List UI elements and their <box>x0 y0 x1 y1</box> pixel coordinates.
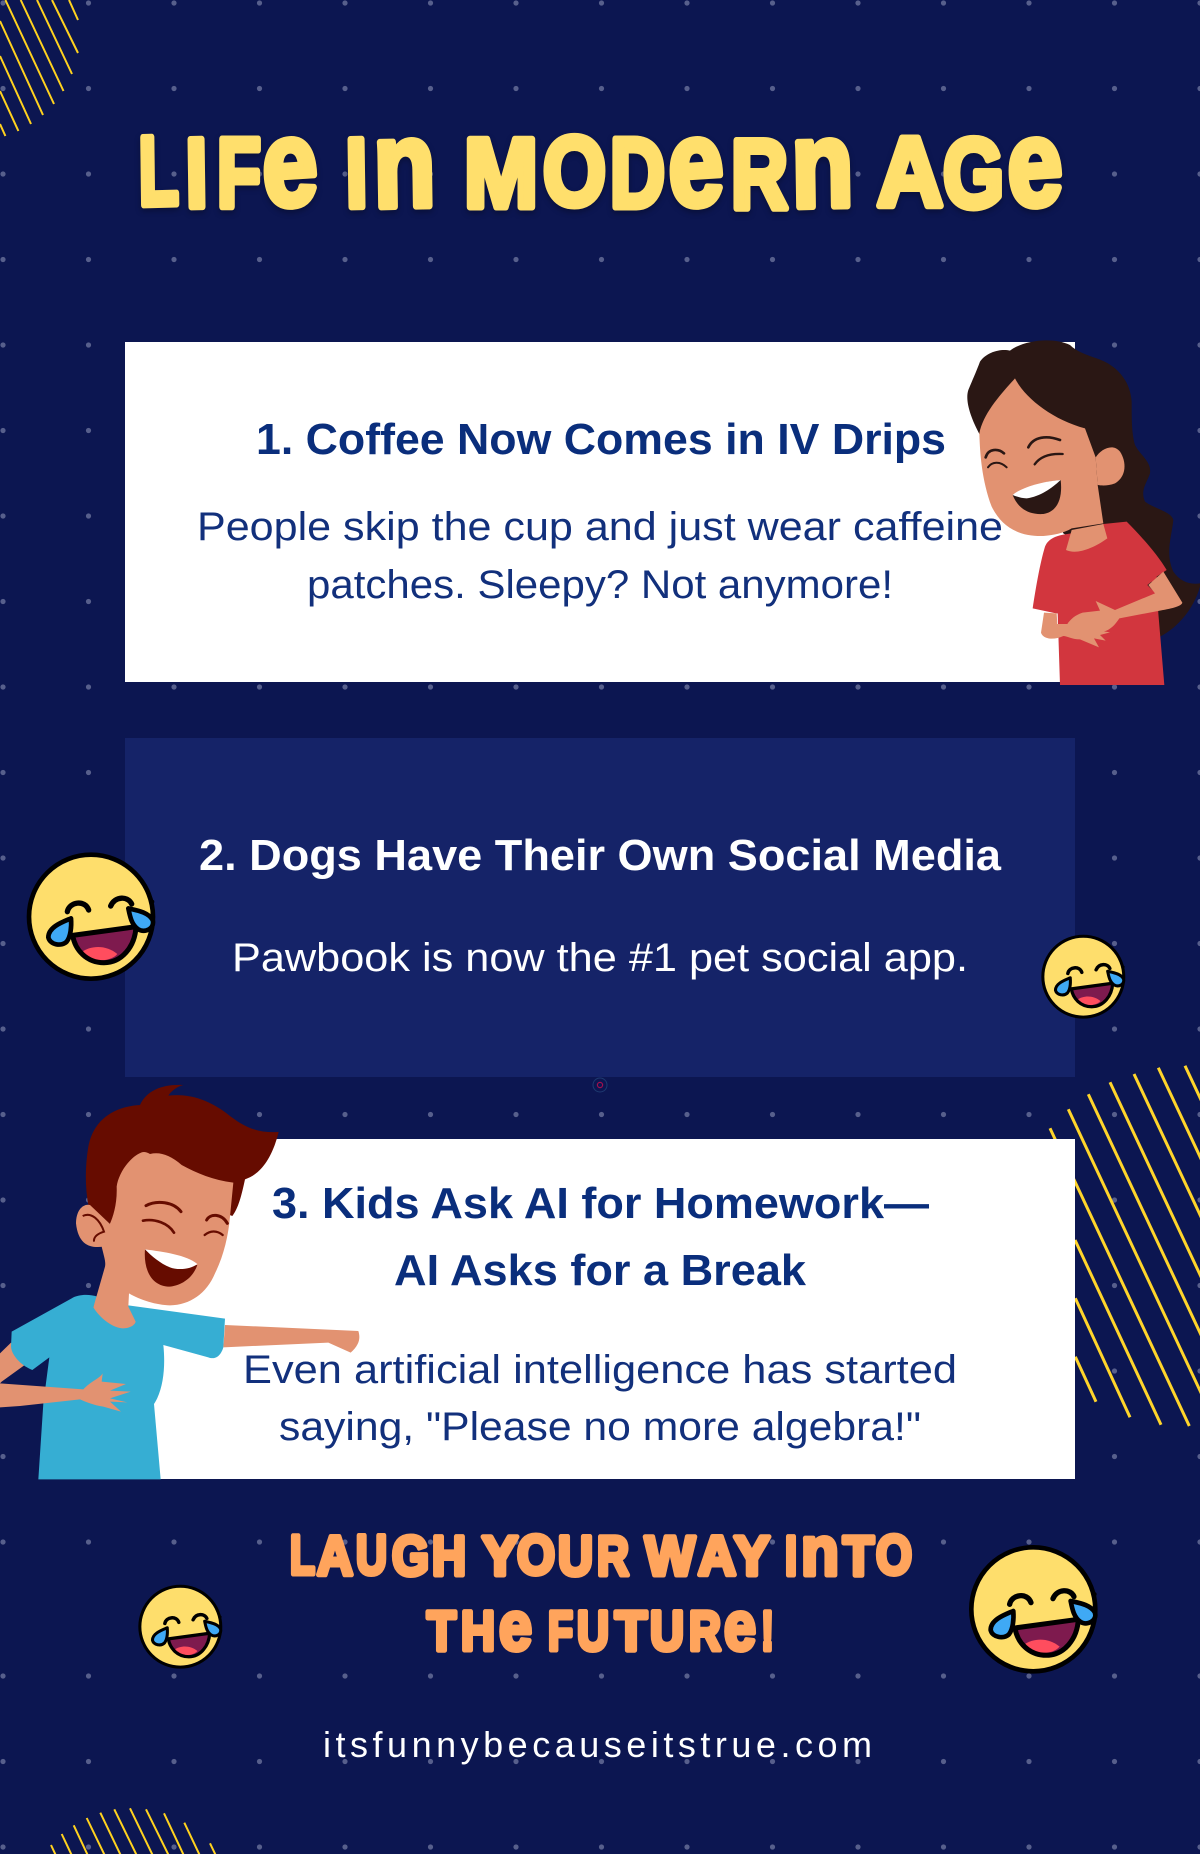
website url: itsfunnybecauseitstrue.com <box>323 1724 872 1765</box>
heading 3: AI Asks for a Break <box>394 1246 807 1295</box>
title: e <box>258 94 320 233</box>
title: e <box>1003 94 1065 233</box>
character: laughing boy <box>0 1085 359 1479</box>
emoji: small right of panel 2 <box>1043 936 1125 1017</box>
closing slogan: e <box>499 1587 532 1665</box>
decoration: yellow stripes right <box>1050 1066 1200 1426</box>
small ring mark <box>593 1078 607 1092</box>
title: A <box>877 117 943 227</box>
panel 3: kids <box>125 1139 1075 1479</box>
closing slogan: T <box>427 1599 456 1662</box>
title: D <box>610 118 665 228</box>
title: G <box>943 118 1004 228</box>
closing slogan: U <box>650 1599 684 1662</box>
title: n <box>790 96 854 233</box>
closing slogan: U <box>558 1524 593 1587</box>
closing slogan: F <box>548 1599 573 1662</box>
closing slogan: e <box>724 1587 756 1665</box>
closing slogan: A <box>317 1524 353 1587</box>
heading 1: 1. Coffee Now Comes in IV Drips <box>256 415 946 464</box>
closing slogan: O <box>876 1523 912 1586</box>
closing slogan: U <box>356 1523 387 1586</box>
decoration: yellow stripes bottom-left <box>51 1808 218 1854</box>
emoji: large bottom-right <box>971 1547 1097 1671</box>
title: I <box>184 118 208 228</box>
panel 2: dogs <box>125 738 1075 1077</box>
body text 1: patches. Sleepy? Not anymore! <box>307 563 893 607</box>
body text 2: Pawbook is now the #1 pet social app. <box>232 936 968 980</box>
title: L <box>137 115 179 226</box>
title: n <box>372 96 436 233</box>
closing slogan: n <box>801 1512 839 1590</box>
closing slogan: R <box>597 1524 629 1587</box>
closing slogan: R <box>689 1599 721 1662</box>
heading 3: 3. Kids Ask AI for Homework— <box>272 1179 929 1228</box>
closing slogan: T <box>615 1599 647 1662</box>
title: I <box>344 118 368 228</box>
character: laughing girl <box>967 340 1200 685</box>
closing slogan: Y <box>734 1524 770 1587</box>
closing slogan: I <box>785 1524 797 1587</box>
closing slogan: A <box>698 1524 736 1587</box>
closing slogan: ! <box>761 1599 774 1662</box>
closing slogan: O <box>517 1523 555 1586</box>
closing slogan: H <box>432 1524 466 1587</box>
heading 2: 2. Dogs Have Their Own Social Media <box>199 831 1002 880</box>
closing slogan: Y <box>482 1524 518 1587</box>
closing slogan: H <box>461 1599 495 1662</box>
closing slogan: W <box>645 1524 695 1587</box>
closing slogan: L <box>290 1523 315 1586</box>
body text 3: saying, "Please no more algebra!" <box>279 1405 921 1449</box>
body text 1: People skip the cup and just wear caffeine <box>197 505 1003 549</box>
closing slogan: T <box>843 1524 874 1587</box>
title: F <box>217 118 261 228</box>
panel 1: coffee <box>125 342 1075 682</box>
decoration: yellow stripes top-left <box>0 0 78 136</box>
body text 3: Even artificial intelligence has started <box>243 1348 957 1392</box>
title: O <box>543 116 606 226</box>
emoji: small bottom-left <box>140 1586 222 1667</box>
title: R <box>731 119 788 229</box>
title: e <box>664 94 726 233</box>
closing slogan: U <box>577 1599 609 1662</box>
title: M <box>464 118 538 228</box>
closing slogan: G <box>392 1524 429 1587</box>
emoji: large left <box>29 855 154 979</box>
